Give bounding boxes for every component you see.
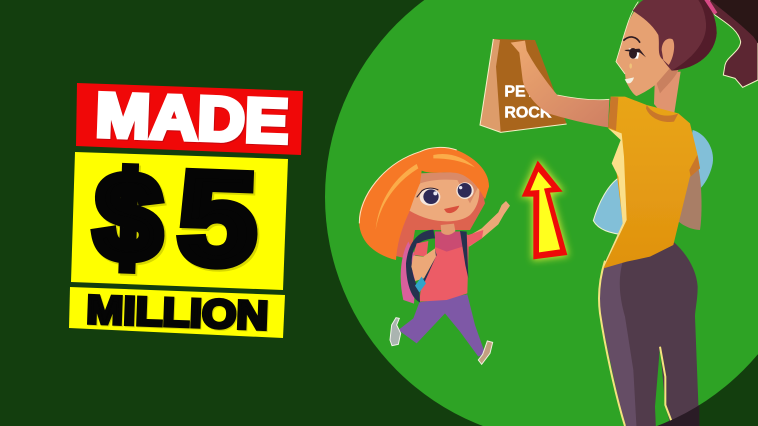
shoe right [478, 341, 493, 364]
far strap [460, 231, 468, 278]
back hair [390, 180, 485, 259]
ponytail [705, 0, 758, 87]
girl body [390, 201, 510, 364]
yellow label: $5: $ [95, 150, 166, 288]
girl head [359, 147, 489, 260]
arrow fill [530, 172, 560, 252]
legs darkened outside circle [657, 405, 700, 426]
yellow label: $5: $ [93, 148, 164, 286]
hair shade [672, 0, 717, 71]
red and yellow up arrow [522, 161, 567, 259]
headline block [69, 81, 303, 339]
red label: MADE: MADE [95, 81, 290, 157]
mouth [444, 206, 459, 213]
neck shadow [657, 63, 678, 93]
neck [654, 72, 681, 115]
illustration: woman holding bag [480, 0, 758, 426]
shoe left [390, 318, 401, 346]
yellow label: $5: 5 [178, 146, 261, 295]
sleeve cuff [608, 97, 618, 131]
yellow t-shirt [603, 97, 700, 268]
orange hair [359, 147, 489, 260]
green spotlight circle [325, 0, 758, 426]
blue buckle [415, 277, 426, 292]
red label: MADE: MADE [95, 82, 291, 158]
paper bag: ROCK [504, 105, 552, 122]
smile [625, 77, 634, 83]
paper bag [480, 39, 567, 132]
arrow outline [522, 161, 567, 259]
face outline [616, 2, 638, 74]
hair top outline [359, 147, 457, 223]
outstretched arm [511, 41, 609, 127]
illustration: girl with backpack [359, 147, 510, 364]
far sleeve cuff [689, 155, 700, 177]
yellow label: MILLION: MILLION [86, 288, 269, 338]
yellow label: $5 [71, 144, 288, 295]
near arm [411, 248, 436, 281]
legs [598, 242, 699, 426]
yellow label: $5: 5 [176, 144, 259, 293]
ear [662, 39, 674, 65]
woman's far arm [674, 168, 702, 230]
eyes [417, 182, 474, 206]
pink hair tie [704, 0, 717, 15]
t-shirt [419, 230, 483, 302]
face [409, 173, 479, 221]
shirt collar [435, 232, 463, 252]
hair highlights [376, 154, 475, 230]
arm outline [557, 95, 609, 100]
purple trousers [398, 294, 485, 357]
brow and eye [623, 37, 646, 69]
neck [441, 224, 455, 235]
bag label: PET [504, 84, 536, 101]
fringe shadow [420, 172, 480, 203]
raised arm [467, 201, 510, 247]
shirt highlight [603, 128, 627, 268]
blue board behind woman [593, 130, 713, 235]
arrow glow [522, 161, 567, 259]
yellow label: MILLION: MILLION [87, 289, 270, 339]
hair bun cap [633, 0, 717, 71]
backpack [401, 242, 417, 304]
backpack strap loop [406, 230, 437, 302]
woman head [616, 0, 758, 96]
face [616, 12, 674, 96]
ponytail shadow [710, 0, 758, 43]
collar [646, 105, 678, 122]
near sleeve [413, 241, 428, 257]
